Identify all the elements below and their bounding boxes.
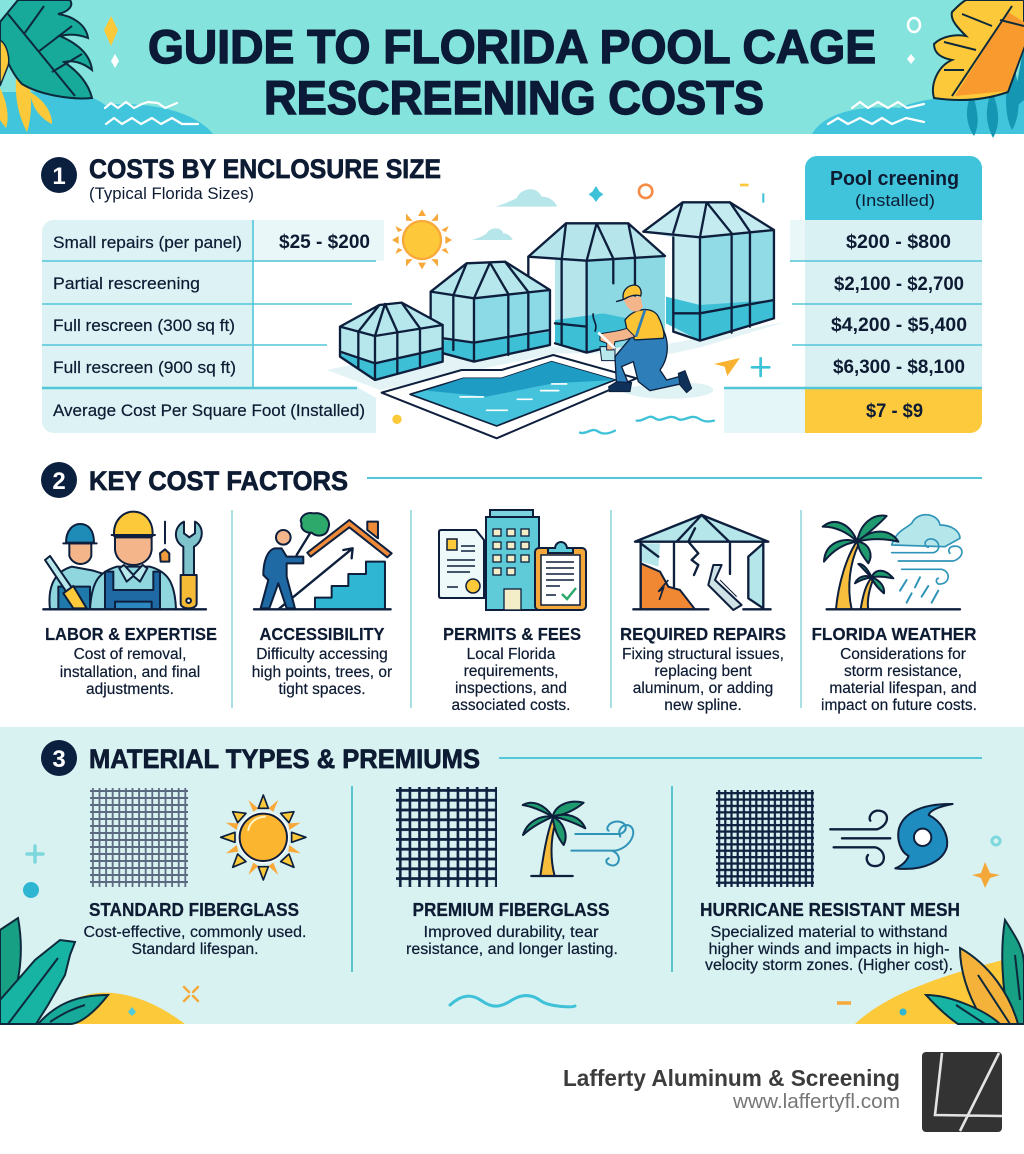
panel: florida weather: storm resistance, [844, 663, 962, 680]
panel: accessibility: high points, trees, or [252, 664, 392, 681]
panel: required repairs [620, 515, 786, 714]
section 3 heading: 3 [52, 746, 66, 773]
icon: hurricane mesh [716, 790, 814, 887]
panel: cost table labels: Full rescreen (300 sq ft) [53, 316, 235, 335]
icon: wind and hurricane [830, 804, 953, 869]
panel: hurricane resistant mesh: higher winds and impacts in high- [708, 941, 950, 958]
panel: required repairs: Fixing structural issues, [622, 646, 784, 663]
row labels: Small repairs (per panel) [53, 233, 242, 252]
footer brand text: Lafferty Aluminum & Screening [563, 1065, 900, 1091]
section 3 band [0, 727, 1024, 1024]
section 1 heading: 1 [52, 163, 66, 190]
illustration: pool cages and worker [327, 185, 787, 438]
icon: yellow fronds left [0, 56, 52, 132]
panel: cost table labels: Full rescreen (900 sq ft) [53, 358, 236, 377]
footer brand text [563, 1065, 900, 1113]
panel: premium fiberglass [396, 787, 633, 958]
panel: standard fiberglass: Standard lifespan. [132, 941, 258, 958]
panel: pool screening price column: $200 - $800 [846, 232, 951, 253]
panel: labor and expertise [43, 512, 217, 698]
icon: climber, stairs and roof [254, 513, 392, 609]
logo [922, 1052, 1002, 1132]
panel: cost table labels: Partial rescreening [53, 274, 200, 293]
icon: standard mesh [90, 788, 188, 887]
panel: required repairs: new spline. [664, 697, 742, 714]
footer brand text: www.laffertyfl.com [732, 1091, 900, 1113]
large cage [528, 223, 665, 353]
panel: hurricane resistant mesh [700, 790, 960, 974]
title [148, 20, 876, 124]
title: GUIDE TO FLORIDA POOL CAGE [148, 20, 876, 73]
icon: palm and wind [523, 802, 633, 876]
panel: cost table labels: $25 - $200 [279, 232, 370, 253]
panel: florida weather: impact on future costs. [821, 697, 977, 714]
title: RESCREENING COSTS [264, 71, 764, 124]
panel: pool screening price column: $7 - $9 [866, 401, 923, 422]
icon: workers and tools [43, 512, 206, 609]
panel: permits and fees: Local Florida [467, 646, 556, 663]
small cage [340, 303, 443, 380]
icon: premium mesh [396, 787, 497, 887]
icon: sun [221, 795, 306, 880]
section 2 heading [41, 462, 982, 498]
icon: clouds [495, 189, 557, 207]
panel: pool screening price column [724, 156, 982, 433]
panel: required repairs: replacing bent [654, 663, 752, 680]
panel: cost table labels [42, 220, 384, 433]
panel: accessibility [252, 513, 392, 698]
icon: blue fronds right [967, 45, 1024, 138]
section 1 heading: (Typical Florida Sizes) [89, 184, 254, 203]
panel: cost table labels: Average Cost Per Square Foot (Installed) [53, 401, 365, 420]
panel: required repairs: REQUIRED REPAIRS [620, 624, 786, 644]
wave blob left [0, 92, 213, 134]
panel: pool screening price column: (Installed) [855, 191, 935, 210]
panel: premium fiberglass: Improved durability, tear [424, 924, 598, 941]
panel: labor and expertise: installation, and final [60, 664, 200, 681]
icon: sun [392, 209, 452, 269]
panel: standard fiberglass: STANDARD FIBERGLASS [89, 899, 299, 920]
section 3 heading: MATERIAL TYPES & PREMIUMS [89, 744, 480, 774]
panel: permits and fees: associated costs. [452, 697, 570, 714]
panel: florida weather: material lifespan, and [829, 680, 977, 697]
panel: accessibility: tight spaces. [278, 681, 366, 698]
panel: hurricane resistant mesh: Specialized material to withstand [710, 924, 948, 941]
panel: labor and expertise: adjustments. [86, 681, 174, 698]
panel: permits and fees: PERMITS & FEES [443, 624, 581, 644]
panel: pool screening price column: $4,200 - $5,400 [831, 315, 967, 336]
panel: hurricane resistant mesh: HURRICANE RESISTANT MESH [700, 899, 960, 920]
section 2 heading: 2 [52, 468, 66, 495]
icon: tropical leaf right [933, 0, 1024, 100]
icon: damaged enclosure [633, 515, 771, 610]
icon: palms, wind and rain [823, 515, 962, 609]
section 3 heading [41, 740, 982, 776]
panel: premium fiberglass: resistance, and longer lasting. [406, 941, 618, 958]
panel: labor and expertise: LABOR & EXPERTISE [45, 624, 217, 644]
pool [382, 355, 637, 438]
ground shadows [327, 322, 787, 390]
panel: accessibility: ACCESSIBILITY [260, 624, 385, 644]
medium cage [431, 262, 550, 362]
section 1 heading: COSTS BY ENCLOSURE SIZE [89, 154, 441, 184]
panel: hurricane resistant mesh: velocity storm zones. (Higher cost). [705, 957, 953, 974]
panel: premium fiberglass: PREMIUM FIBERGLASS [412, 899, 610, 920]
decorative sparkles [104, 16, 924, 124]
decorative bottom right [855, 920, 1024, 1024]
icon: monstera leaf left [0, 0, 92, 98]
panel: permits and fees: requirements, [464, 663, 558, 680]
panel: labor and expertise: Cost of removal, [74, 646, 186, 663]
decorative shapes [589, 186, 603, 202]
wave blob right [812, 90, 1024, 134]
panel: pool screening price column: $2,100 - $2,700 [834, 274, 964, 295]
panel: pool screening price column: Pool creening [830, 168, 959, 190]
section 1 heading [41, 154, 441, 203]
extra large cage [643, 202, 774, 341]
panel: florida weather: Considerations for [840, 646, 966, 663]
panel: florida weather: FLORIDA WEATHER [812, 624, 977, 644]
panel: required repairs: aluminum, or adding [633, 680, 773, 697]
panel: pool screening price column: $6,300 - $8,100 [833, 357, 965, 378]
decorative bottom left [0, 918, 185, 1024]
panel: permits and fees [439, 510, 586, 714]
panel: florida weather [812, 515, 977, 714]
icon: document, building and clipboard [439, 510, 586, 610]
panel: standard fiberglass: Cost-effective, commonly used. [84, 924, 306, 941]
section 2 heading: KEY COST FACTORS [89, 466, 348, 496]
header banner [0, 0, 1024, 138]
panel: accessibility: Difficulty accessing [256, 646, 388, 663]
decorative sparkles [23, 837, 1000, 1016]
panel: standard fiberglass [84, 788, 306, 958]
panel: permits and fees: inspections, and [455, 680, 567, 697]
worker [593, 285, 692, 393]
